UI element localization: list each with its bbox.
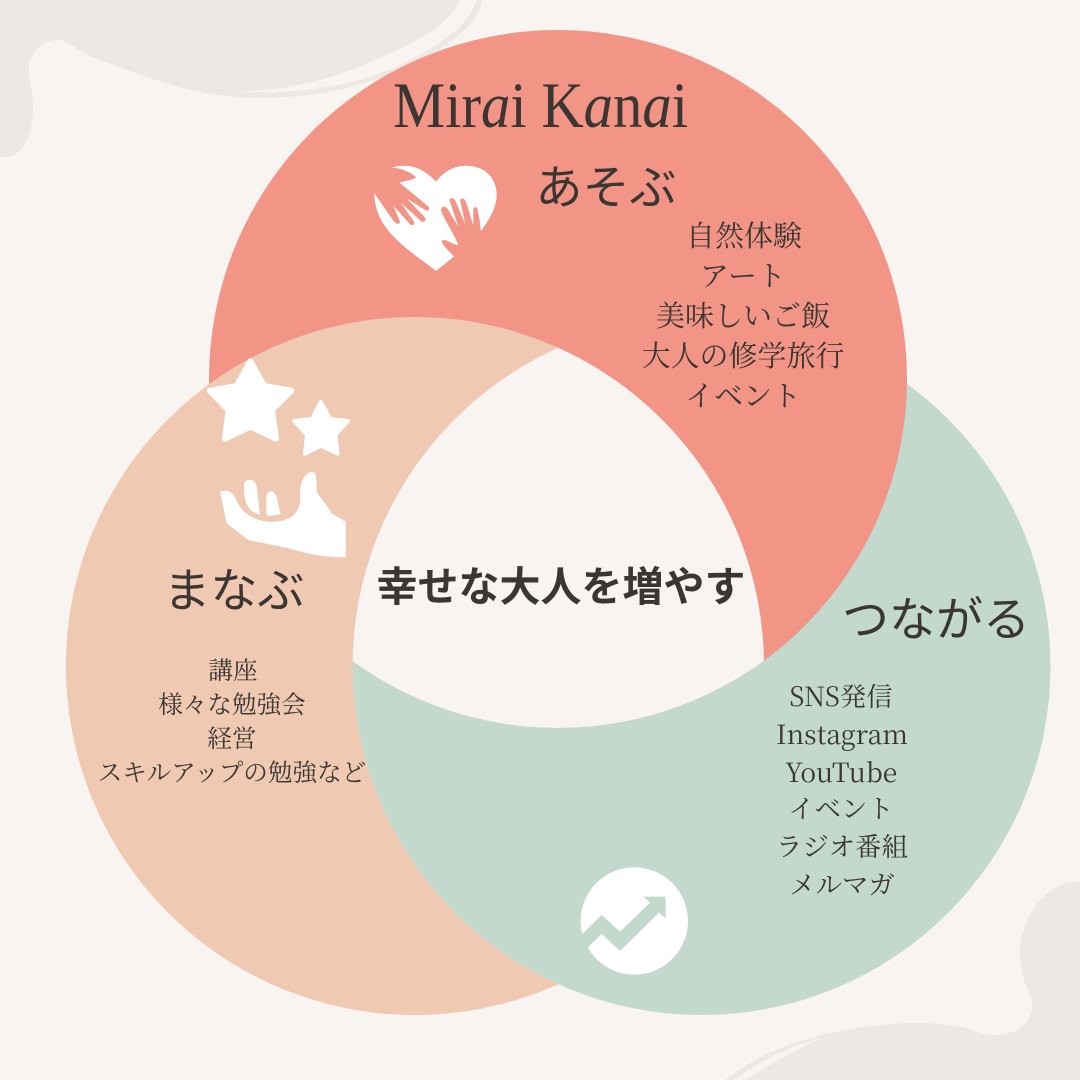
- decorative blob: bottom right: [725, 882, 1080, 1080]
- heading: manabu: まなぶ: [164, 564, 304, 617]
- list: tsunagaru items: ラジオ番組: [776, 826, 908, 864]
- list: manabu items: [98, 652, 366, 789]
- circle: asobu red: [209, 30, 907, 728]
- icon: stars and hand: [210, 361, 348, 557]
- list: tsunagaru items: YouTube: [785, 752, 897, 790]
- list: asobu items: 美味しいご飯: [656, 294, 830, 335]
- circle: tsunagaru green: [352, 317, 1050, 1015]
- list: asobu items: 自然体験: [686, 214, 802, 255]
- list: tsunagaru items: [776, 676, 908, 902]
- list: asobu items: 大人の修学旅行: [641, 334, 845, 375]
- list: tsunagaru items: イベント: [788, 788, 894, 826]
- list: asobu items: [641, 214, 845, 415]
- list: manabu items: スキルアップの勉強など: [98, 754, 366, 789]
- heading: tsunagaru: つながる: [842, 593, 1030, 646]
- list: tsunagaru items: SNS発信: [789, 676, 893, 714]
- big star: [210, 361, 291, 439]
- list: asobu items: アート: [700, 254, 786, 295]
- list: manabu items: 様々な勉強会: [158, 686, 306, 721]
- list: tsunagaru items: Instagram: [776, 714, 908, 752]
- list: manabu items: 経営: [207, 720, 257, 755]
- icon: heart with hands: [374, 166, 497, 271]
- list: tsunagaru items: メルマガ: [789, 864, 895, 902]
- decorative blob: top left: [0, 0, 482, 157]
- center region: [352, 346, 764, 728]
- heading: asobu: あそぶ: [536, 161, 676, 214]
- list: asobu items: イベント: [685, 374, 801, 415]
- icon: growth chart: [577, 867, 688, 975]
- center message: 幸せな大人を増やす: [376, 564, 746, 610]
- title: Mirai Kanai: [393, 70, 688, 142]
- crescent: manabu peach: [66, 317, 558, 1015]
- open hand: [220, 472, 346, 557]
- list: manabu items: 講座: [208, 652, 258, 687]
- small star: [294, 402, 348, 454]
